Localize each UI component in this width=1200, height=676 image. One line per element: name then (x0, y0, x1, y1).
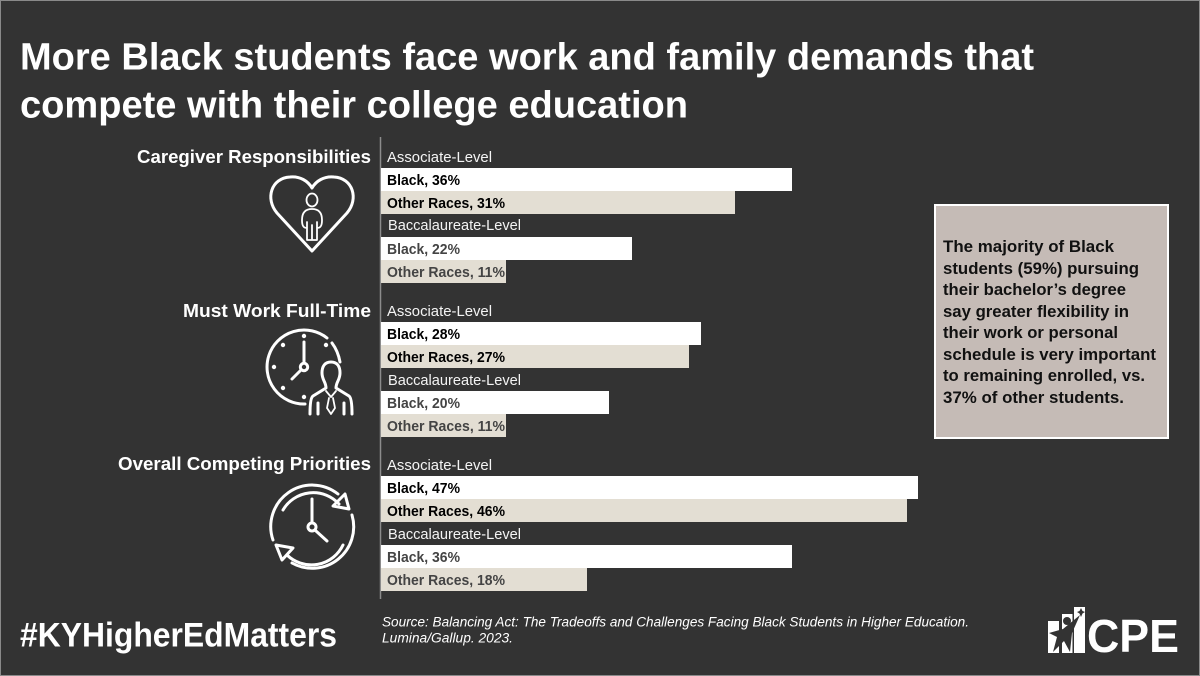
bar chart: caregiver responsibilities (381, 150, 792, 283)
bar chart: overall competing priorities: Other Races, 46% (387, 504, 505, 520)
heading: overall competing priorities: Overall Competing Priorities (118, 453, 371, 474)
axis line (380, 137, 382, 599)
bar chart: must work full-time: Associate-Level (387, 304, 492, 320)
bar chart: overall competing priorities: Associate-Level (387, 458, 492, 474)
bar chart: must work full-time: Black, 20% (387, 396, 460, 412)
panel: overall competing priorities (118, 453, 918, 591)
bar chart: overall competing priorities: Black, 47% (387, 481, 460, 497)
icon: rising star figure (1048, 607, 1085, 653)
bar chart: must work full-time: Other Races, 27% (387, 350, 505, 366)
callout: say greater flexibility in (943, 302, 1129, 321)
bar chart: caregiver responsibilities: Other Races, 11% (387, 265, 505, 281)
title: More Black students face work and family demands that (20, 36, 1034, 78)
bar chart: must work full-time: Other Races, 11% (387, 419, 505, 435)
callout: students (59%) pursuing (943, 259, 1139, 278)
icon: clock with worker (267, 330, 352, 414)
source note (382, 614, 969, 646)
bar chart: caregiver responsibilities: Associate-Level (387, 150, 492, 166)
panel: caregiver responsibilities (137, 146, 792, 283)
bar chart: caregiver responsibilities: Baccalaureate-Level (388, 218, 521, 234)
logo: CPE: CPE (1087, 610, 1179, 662)
heading: caregiver responsibilities: Caregiver Responsibilities (137, 146, 371, 167)
heading: must work full-time: Must Work Full-Time (183, 300, 371, 321)
icon: heart with person (271, 177, 353, 251)
bar chart: overall competing priorities: Baccalaureate-Level (388, 527, 521, 543)
callout (935, 205, 1168, 438)
source note: Source: Balancing Act: The Tradeoffs and Challenges Facing Black Students in Higher Education. (382, 614, 969, 630)
panel: must work full-time (183, 300, 701, 437)
callout: schedule is very important (943, 345, 1156, 364)
bar chart: caregiver responsibilities: Other Races, 31% (387, 196, 505, 212)
title (20, 36, 1034, 126)
hashtag: #KYHigherEdMatters (20, 616, 337, 654)
bar chart: overall competing priorities (381, 458, 918, 591)
bar chart: overall competing priorities: Other Races, 18% (387, 573, 505, 589)
bar chart: must work full-time: Black, 28% (387, 327, 460, 343)
logo: CPE (1048, 607, 1179, 662)
source note: Lumina/Gallup. 2023. (382, 630, 513, 646)
bar chart: overall competing priorities: Black, 36% (387, 550, 460, 566)
bar chart: must work full-time: Baccalaureate-Level (388, 373, 521, 389)
bar chart: caregiver responsibilities: Black, 36% (387, 173, 460, 189)
callout: their bachelor’s degree (943, 280, 1126, 299)
bar chart: caregiver responsibilities: Black, 22% (387, 242, 460, 258)
title: compete with their college education (20, 84, 688, 126)
callout: to remaining enrolled, vs. (943, 366, 1145, 385)
icon: clock with circular arrows (271, 485, 354, 568)
bar chart: must work full-time (381, 304, 701, 437)
callout: their work or personal (943, 323, 1118, 342)
callout: 37% of other students. (943, 388, 1124, 407)
callout: The majority of Black (943, 237, 1115, 256)
